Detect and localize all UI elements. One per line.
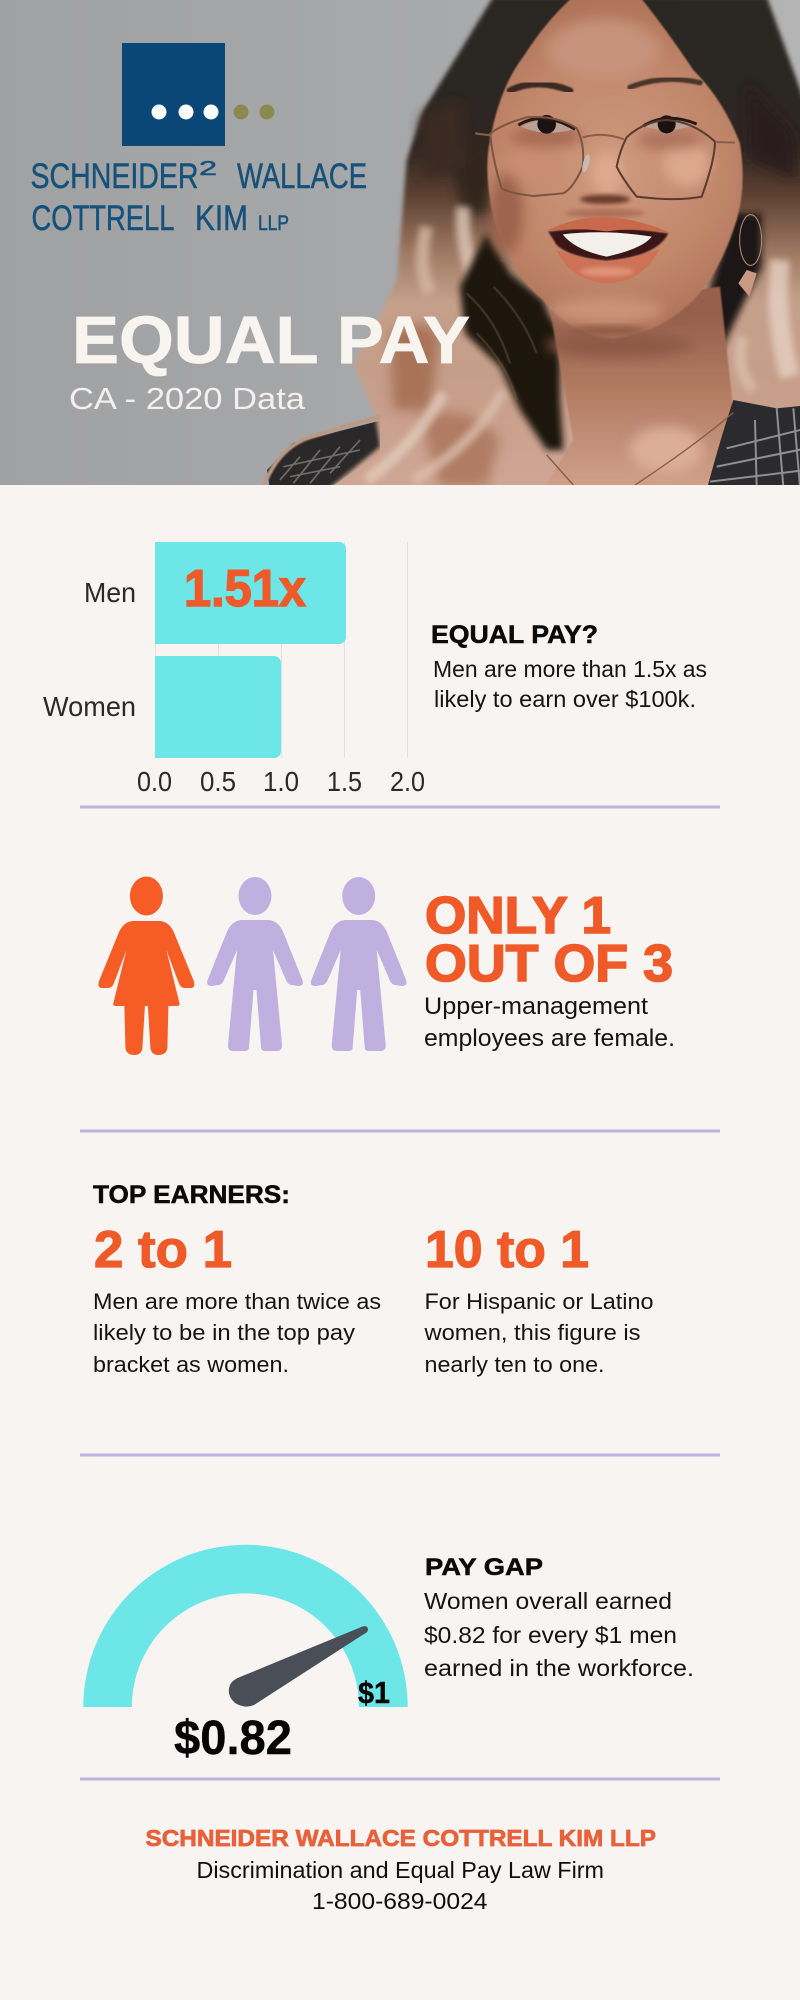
dark under-hair (460, 233, 563, 450)
text block: only 1 out of 3: OUT OF 3 (425, 935, 673, 993)
value label: 1.51x (184, 560, 306, 618)
stat: 10 to 1: 10 to 1 (425, 1221, 589, 1279)
category labels: Men (84, 577, 136, 608)
hair lock over blazer (263, 417, 380, 488)
necklace (547, 413, 733, 485)
axis labels: 1.0 (263, 766, 299, 797)
axis labels: 0.0 (137, 766, 172, 797)
category labels (43, 577, 136, 722)
stat: 2 to 1: bracket as women. (93, 1352, 289, 1377)
glasses (490, 117, 583, 196)
text block: pay gap: Women overall earned (424, 1588, 672, 1614)
text block: pay gap: PAY GAP (425, 1554, 543, 1581)
gauge needle (229, 1626, 368, 1707)
gauge arc (83, 1545, 408, 1707)
gauge value: $0.82 (174, 1712, 292, 1765)
text block: only 1 out of 3 (424, 887, 675, 1052)
text block: pay gap: earned in the workforce. (424, 1655, 694, 1681)
icon: three people (98, 876, 407, 1055)
blazer right (707, 400, 800, 490)
bar: men (155, 542, 346, 644)
stat: 10 to 1 (423, 1221, 654, 1377)
hair mass (327, 0, 800, 490)
gauge max label: $1 (358, 1675, 390, 1710)
logo wordmark: COTTRELL (32, 199, 174, 238)
subtitle: CA - 2020 Data (69, 381, 306, 416)
logo wordmark: WALLACE (237, 157, 367, 196)
axis labels: 2.0 (390, 766, 425, 797)
footer: Discrimination and Equal Pay Law Firm (196, 1857, 604, 1883)
logo square (122, 43, 225, 146)
icon: man one (207, 877, 303, 1051)
stat: 2 to 1: Men are more than twice as (93, 1289, 381, 1314)
logo wordmark: LLP (258, 212, 289, 235)
neck (543, 287, 733, 490)
mouth (548, 228, 668, 261)
text block: pay gap (424, 1554, 694, 1681)
panel: header photo (0, 0, 800, 490)
logo wordmark (30, 157, 367, 238)
logo wordmark: 2 (199, 158, 217, 180)
category labels: Women (43, 691, 136, 722)
icon: woman (98, 876, 194, 1055)
face (487, 0, 743, 338)
icon: man two (311, 877, 407, 1051)
bar chart (43, 542, 425, 797)
stat: 10 to 1: women, this figure is (423, 1320, 640, 1345)
bar: women (155, 656, 281, 758)
text block: only 1 out of 3: ONLY 1 (425, 887, 611, 945)
footer: 1-800-689-0024 (312, 1888, 488, 1914)
footer (146, 1825, 656, 1914)
logo wordmark: KIM (195, 199, 248, 238)
earring (740, 215, 762, 265)
axis labels (137, 766, 425, 797)
stat: 10 to 1: For Hispanic or Latino (424, 1289, 654, 1314)
stat: 10 to 1: nearly ten to one. (424, 1352, 604, 1377)
reddish and highlighted hair (390, 100, 500, 487)
logo dots (152, 104, 274, 120)
heading: top earners: TOP EARNERS: (93, 1181, 290, 1209)
blazer left (267, 421, 380, 490)
text block: pay gap: $0.82 for every $1 men (424, 1622, 677, 1648)
text block: equal pay: Men are more than 1.5x as (433, 656, 707, 682)
gauge chart (83, 1545, 408, 1765)
title: EQUAL PAY (72, 303, 470, 378)
eyebrows (510, 84, 570, 91)
stat: 2 to 1: 2 to 1 (94, 1221, 232, 1279)
text block: equal pay: likely to earn over $100k. (434, 686, 696, 712)
stat: 2 to 1: likely to be in the top pay (93, 1320, 355, 1345)
text block: only 1 out of 3: employees are female. (424, 1025, 675, 1052)
stat: 2 to 1 (93, 1221, 381, 1377)
axis labels: 0.5 (200, 766, 236, 797)
text block: equal pay: EQUAL PAY? (431, 621, 598, 649)
text block: equal pay (431, 621, 707, 712)
text block: only 1 out of 3: Upper-management (424, 993, 648, 1020)
logo (30, 43, 367, 238)
eyes (522, 121, 573, 133)
axis labels: 1.5 (327, 766, 362, 797)
footer: SCHNEIDER WALLACE COTTRELL KIM LLP (146, 1825, 656, 1851)
logo wordmark: SCHNEIDER (30, 157, 198, 196)
